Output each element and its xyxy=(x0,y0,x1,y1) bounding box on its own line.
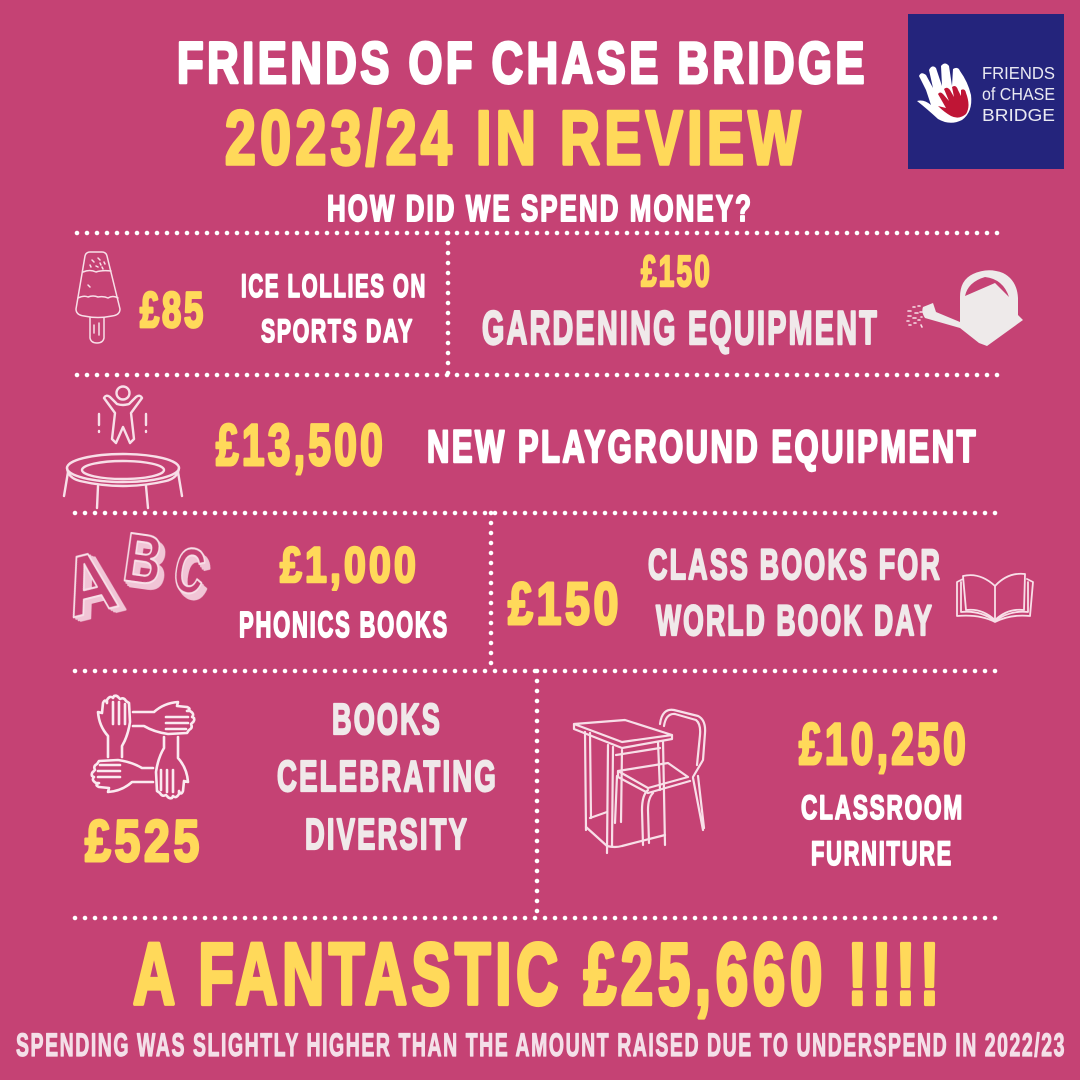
icon: ABC letters xyxy=(54,518,211,635)
icon: ABC letters: A xyxy=(54,532,125,635)
panel: playground equipment xyxy=(64,386,978,508)
amount: £150: £150 xyxy=(508,571,622,637)
label: classroom furniture xyxy=(801,789,964,873)
subtitle: year in review: 2023/24 IN REVIEW xyxy=(225,96,805,181)
label: ice lollies on sports day: ICE LOLLIES ON xyxy=(241,268,427,304)
panel: classroom furniture xyxy=(574,710,969,873)
panel: phonics books xyxy=(54,518,449,645)
amount: £1,000: £1,000 xyxy=(280,537,419,593)
panel: books celebrating diversity xyxy=(85,695,498,874)
icon: ABC letters: B xyxy=(119,518,167,600)
label: books celebrating diversity: BOOKS xyxy=(332,695,442,744)
title: FRIENDS OF CHASE BRIDGE xyxy=(177,31,868,96)
icon: open book xyxy=(957,574,1033,622)
icon: four joined hands xyxy=(92,696,194,798)
heading: how did we spend money: HOW DID WE SPEND MONEY? xyxy=(327,188,753,229)
label: ice lollies on sports day xyxy=(241,268,427,349)
label: books celebrating diversity: DIVERSITY xyxy=(305,810,469,859)
panel: gardening equipment xyxy=(482,247,1023,354)
icon: desk and chair xyxy=(574,710,705,853)
icon: trampoline xyxy=(64,386,182,508)
logo xyxy=(908,14,1064,169)
label: ice lollies on sports day: SPORTS DAY xyxy=(261,313,414,349)
panel: ice lollies xyxy=(76,252,427,349)
amount: £10,250: £10,250 xyxy=(799,712,969,777)
icon: ice lolly xyxy=(76,252,120,343)
logo: of CHASE xyxy=(982,84,1055,104)
amount: £525: £525 xyxy=(85,809,203,874)
label: books celebrating diversity: CELEBRATING xyxy=(277,752,498,801)
icon: watering can xyxy=(907,270,1023,346)
amount: £13,500: £13,500 xyxy=(216,413,386,478)
label: classroom furniture: FURNITURE xyxy=(811,835,953,873)
logo: BRIDGE xyxy=(982,105,1055,125)
label: books celebrating diversity xyxy=(277,695,498,859)
logo: FRIENDS xyxy=(982,63,1055,83)
icon: ABC letters: C xyxy=(169,533,211,609)
label: phonics books: PHONICS BOOKS xyxy=(239,604,449,645)
amount: £150: £150 xyxy=(641,247,712,296)
amount: £85: £85 xyxy=(140,282,206,338)
panel: world book day xyxy=(508,541,1033,645)
label: class books for world book day xyxy=(648,541,942,645)
label: classroom furniture: CLASSROOM xyxy=(801,789,964,827)
